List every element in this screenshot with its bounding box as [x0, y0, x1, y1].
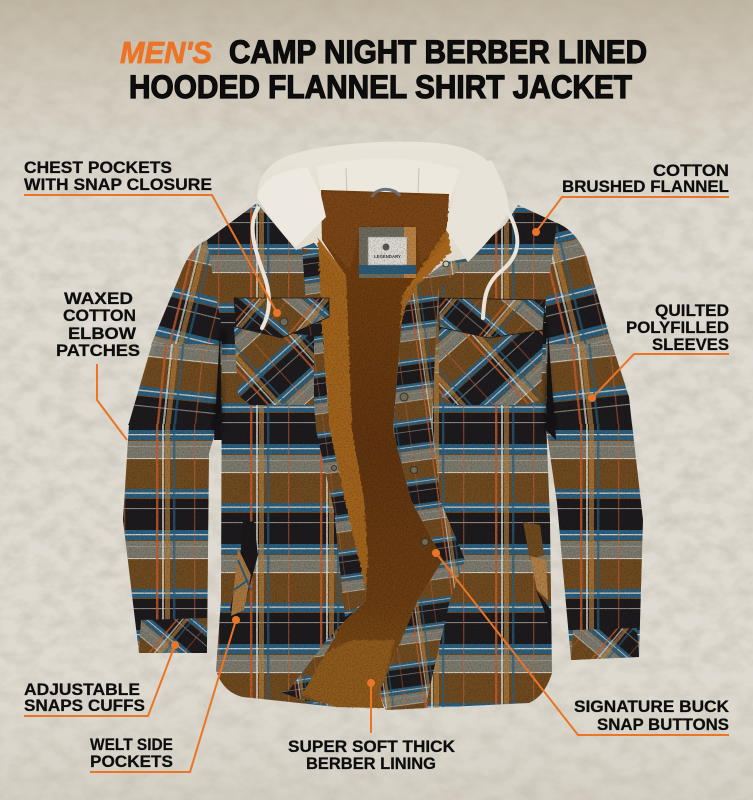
title: HOODED FLANNEL SHIRT JACKET	[129, 69, 632, 105]
label: signature buck snap buttons: SNAP BUTTONS	[597, 715, 729, 734]
label: waxed cotton elbow patches: COTTON	[63, 306, 136, 325]
snap buttons	[280, 261, 449, 546]
label: quilted polyfilled sleeves: SLEEVES	[652, 335, 729, 354]
label: chest pockets	[24, 158, 212, 194]
leader end dots	[171, 228, 596, 687]
label: waxed cotton elbow patches: PATCHES	[56, 341, 140, 360]
label: super soft thick berber lining: SUPER SOFT THICK	[288, 737, 456, 756]
hood	[257, 142, 509, 262]
label: waxed cotton elbow patches: ELBOW	[68, 324, 137, 343]
jacket illustration	[123, 142, 643, 710]
leader: cotton brushed flannel	[536, 197, 729, 232]
label: chest pockets: CHEST POCKETS	[24, 158, 172, 177]
seam shadows	[213, 320, 556, 440]
leader: welt side pockets	[90, 620, 236, 772]
label: super soft thick berber lining: BERBER LINING	[306, 754, 436, 773]
leader: berber lining	[370, 683, 372, 733]
right sleeve	[530, 223, 643, 660]
right chest pocket	[439, 298, 545, 405]
label: quilted polyfilled sleeves: QUILTED	[655, 301, 729, 320]
label: quilted polyfilled sleeves	[626, 301, 729, 354]
title: CAMP NIGHT BERBER LINED	[229, 34, 647, 70]
neck label patch	[359, 189, 416, 278]
right body panel	[379, 205, 557, 710]
label: adjustable snaps cuffs: SNAPS CUFFS	[24, 696, 145, 715]
leader: adjustable cuffs	[24, 645, 175, 716]
title	[120, 34, 647, 105]
right welt pocket	[523, 522, 551, 635]
left welt pocket	[230, 520, 258, 618]
label: welt side pockets	[90, 735, 173, 771]
leader lines	[24, 195, 729, 772]
hood side flaps	[257, 160, 509, 262]
left chest pocket	[234, 298, 329, 405]
left body panel	[207, 203, 366, 707]
label: chest pockets: WITH SNAP CLOSURE	[24, 175, 212, 194]
label: waxed cotton elbow patches: WAXED	[64, 289, 133, 308]
leader: signature snaps	[436, 553, 729, 735]
sherpa edge bands	[318, 228, 451, 590]
label: signature buck snap buttons: SIGNATURE BUCK	[574, 697, 730, 716]
label: welt side pockets: WELT SIDE	[90, 735, 173, 754]
title: MEN'S	[120, 35, 212, 70]
label: welt side pockets: POCKETS	[90, 752, 173, 771]
label: cotton brushed flannel: COTTON	[653, 161, 729, 180]
sherpa lining	[289, 190, 449, 708]
label: cotton brushed flannel	[562, 161, 729, 196]
drawstrings	[253, 208, 517, 328]
label: adjustable snaps cuffs	[24, 680, 145, 715]
fabric fuzz overlay	[123, 190, 643, 710]
left sleeve	[123, 240, 232, 653]
label: adjustable snaps cuffs: ADJUSTABLE	[24, 680, 140, 699]
label: cotton brushed flannel: BRUSHED FLANNEL	[562, 177, 729, 196]
label: waxed cotton elbow patches	[56, 289, 140, 360]
leader: waxed elbow patches	[97, 364, 127, 440]
label: signature buck snap buttons	[574, 697, 730, 734]
leader: chest pockets	[24, 195, 277, 313]
neck label patch: LEGENDARY	[374, 254, 401, 259]
label: quilted polyfilled sleeves: POLYFILLED	[626, 318, 729, 337]
label: super soft thick berber lining	[288, 737, 456, 773]
leader: quilted sleeves	[592, 354, 729, 398]
